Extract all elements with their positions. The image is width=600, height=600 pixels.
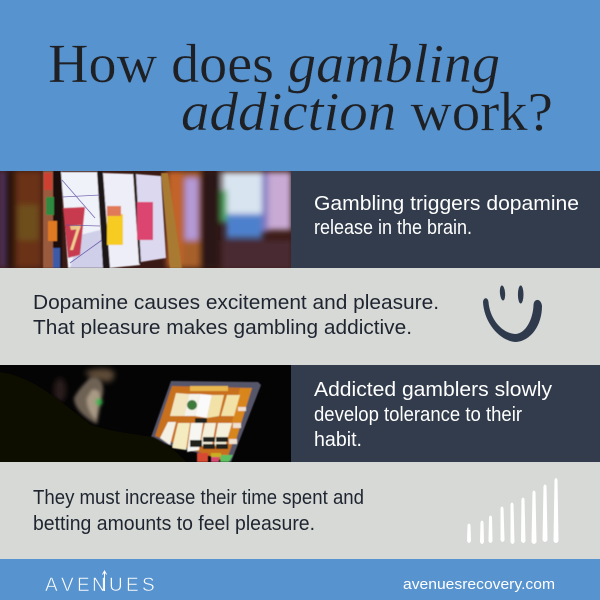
text: excitement: Dopamine causes excitement and pleasure. — [33, 292, 439, 314]
text: increase: They must increase their time spent and — [33, 487, 364, 509]
title — [48, 33, 553, 142]
footer band — [0, 559, 600, 600]
text: dopamine release: release in the brain. — [314, 217, 472, 239]
text: increase — [33, 487, 364, 535]
photo: person at tablet — [0, 365, 291, 462]
photo: slot machines — [0, 171, 292, 270]
text: tolerance: habit. — [314, 429, 362, 451]
grey band 1 — [0, 268, 600, 365]
website url: avenuesrecovery.com — [403, 576, 555, 593]
title: How does gambling — [48, 33, 500, 94]
text: dopamine release: Gambling triggers dopamine — [314, 193, 579, 215]
grey band 2 — [0, 462, 600, 559]
text: tolerance: Addicted gamblers slowly — [314, 379, 552, 401]
text: tolerance: develop tolerance to their — [314, 404, 522, 426]
icon: rising bars — [467, 478, 558, 544]
dark panel 1 — [291, 171, 600, 268]
text: increase: betting amounts to feel pleasure. — [33, 513, 315, 535]
dark panel 2 — [291, 365, 600, 462]
text: tolerance — [314, 379, 552, 451]
header band — [0, 0, 600, 171]
text: excitement — [33, 292, 439, 339]
title: addiction work? — [181, 81, 553, 142]
text: excitement: That pleasure makes gambling addictive. — [33, 317, 412, 339]
text: dopamine release — [314, 193, 579, 239]
logo: Avenues: AVENUES — [45, 575, 155, 596]
icon: smiley — [483, 285, 542, 342]
